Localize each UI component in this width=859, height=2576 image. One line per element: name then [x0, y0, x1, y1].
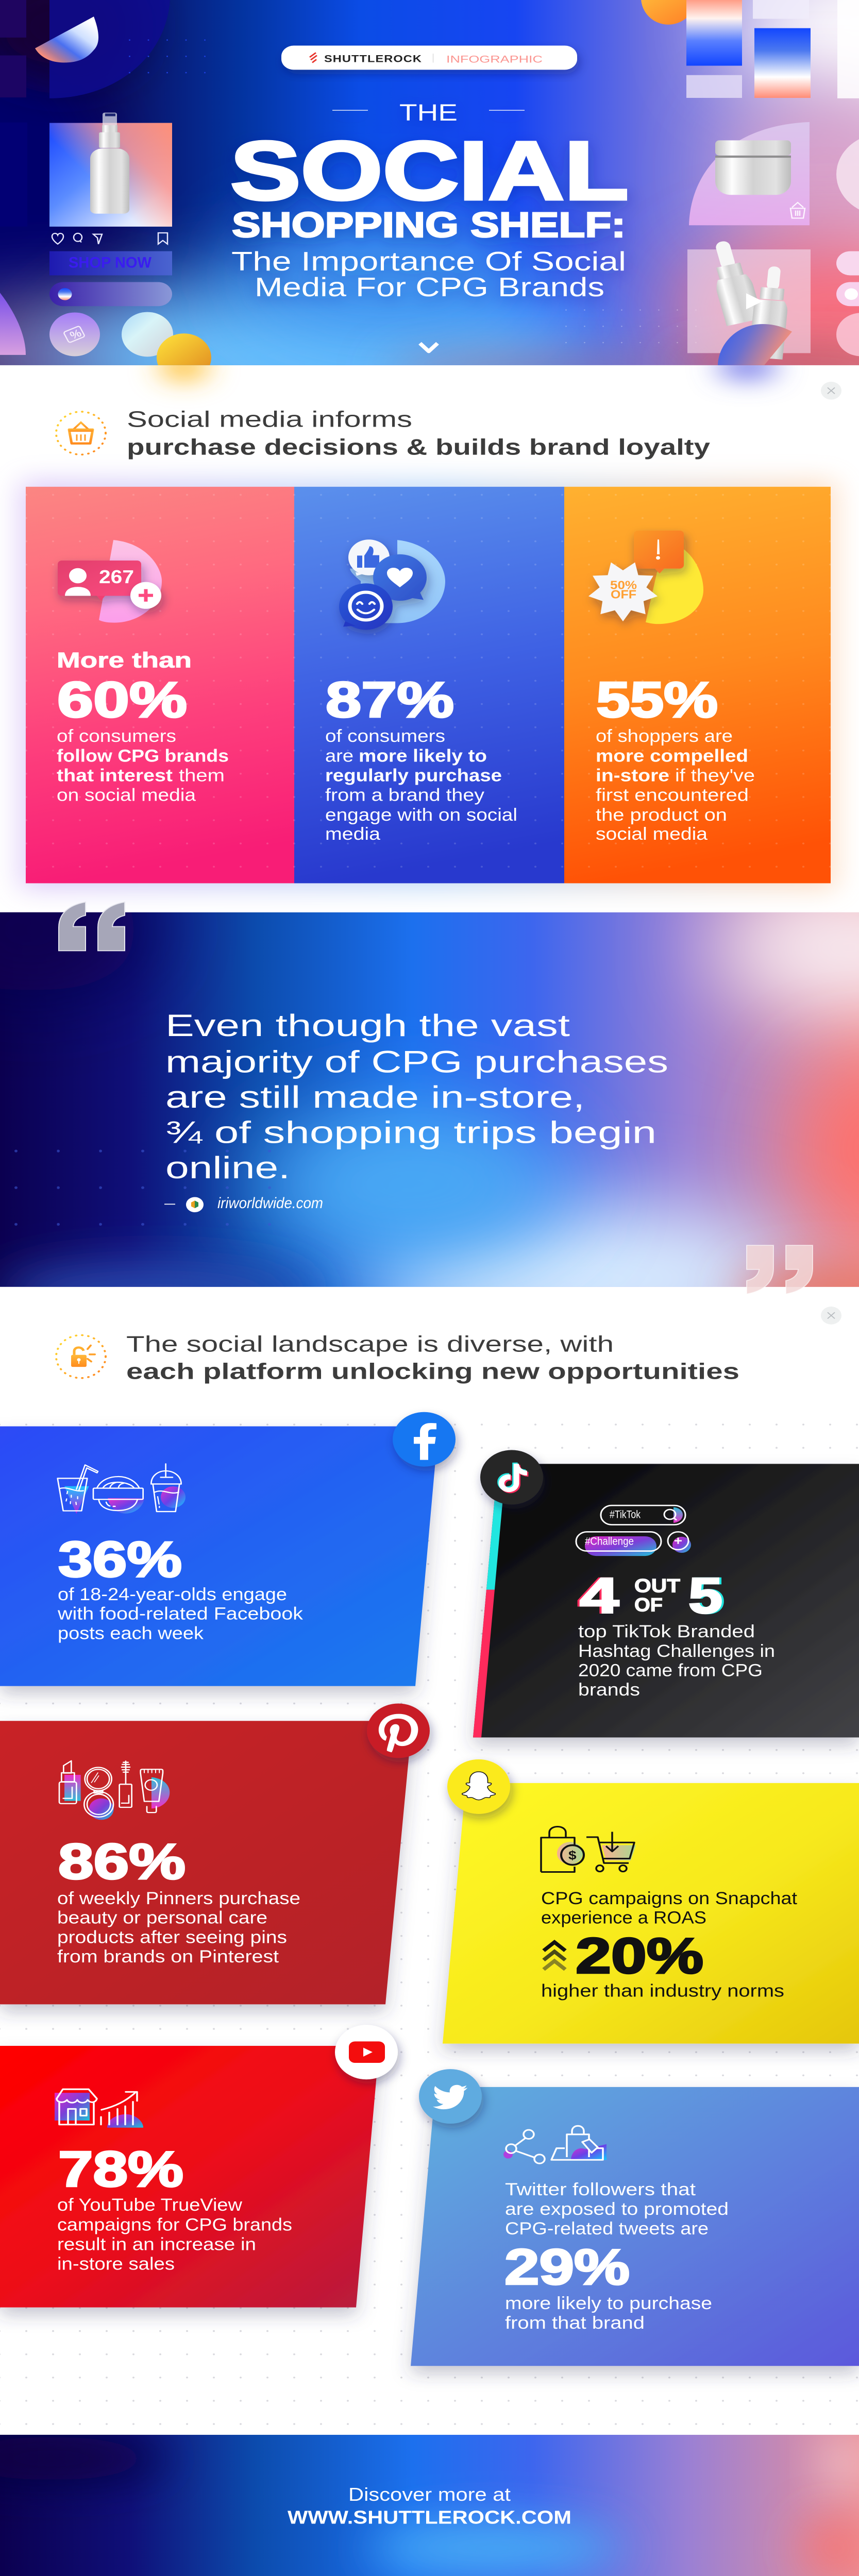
- close marker: section two: [821, 1307, 841, 1325]
- stat text: brands: [578, 1680, 640, 1699]
- stat text: follow CPG brands: [57, 746, 229, 766]
- stat text: on social media: [57, 785, 196, 805]
- stat text: More than: [57, 648, 192, 672]
- stat text: social media: [596, 824, 708, 844]
- heading: section one: Social media informs: [127, 407, 412, 432]
- title: THE: [399, 100, 458, 126]
- panel: footer: [0, 2435, 859, 2576]
- logo pill: SHUTTLEROCK: [324, 54, 422, 64]
- stat text: from that brand: [505, 2313, 645, 2333]
- title: SOCIAL: [230, 124, 629, 217]
- stat text: in-store: [596, 766, 669, 785]
- stat text: higher than industry norms: [541, 1981, 784, 2001]
- stat text: [325, 672, 517, 844]
- stat text: [57, 648, 229, 805]
- stat text: from a brand they: [325, 785, 485, 805]
- stat text: with food-related Facebook: [57, 1604, 304, 1623]
- stat text: the product on: [596, 805, 727, 824]
- panel glow: [21, 481, 836, 890]
- icon: twitter badge: [419, 2069, 482, 2124]
- call to action: WWW.SHUTTLEROCK.COM: [288, 2507, 571, 2528]
- oval badges: [49, 312, 173, 357]
- shop now button: SHOP NOW: [69, 254, 151, 271]
- panel: quote: [0, 867, 859, 1354]
- hero mesh gradient background: [0, 0, 859, 365]
- stat text: of weekly Pinners purchase: [57, 1888, 300, 1908]
- logo pill: INFOGRAPHIC: [446, 54, 543, 65]
- quote text: are still made in-store,: [165, 1079, 585, 1114]
- heading: section one: purchase decisions & builds brand loyalty: [127, 434, 710, 460]
- icon: follower notification: 267: [99, 567, 134, 588]
- stat text: [57, 2141, 292, 2274]
- icon: tiktok badge: [480, 1450, 543, 1504]
- serum bottles card: [687, 238, 811, 365]
- stat text: [541, 1888, 797, 2001]
- scroll chevron: [420, 343, 437, 351]
- stat: 4 out of 5: [578, 1568, 725, 1624]
- icon: hashtag search pills: #Challenge: [585, 1535, 634, 1547]
- icon: sale badge and alert: 50%: [610, 579, 637, 592]
- card: twitter: [411, 2069, 859, 2366]
- stat text: first encountered: [596, 785, 749, 805]
- card: facebook: [0, 1412, 456, 1686]
- stat text: of shoppers are: [596, 726, 733, 746]
- icon: sale badge and alert: [588, 531, 703, 624]
- stat text: of YouTube TrueView: [57, 2195, 243, 2215]
- stat text: more likely to: [359, 746, 487, 766]
- title: SHOPPING SHELF:: [232, 205, 626, 245]
- stat text: Twitter followers that: [505, 2179, 696, 2199]
- icon: pinterest badge: [367, 1703, 430, 1758]
- stat: 4 out of 5: 5: [688, 1568, 722, 1624]
- icon: bag and cart: $: [568, 1848, 577, 1862]
- stat text: 55%: [596, 672, 718, 728]
- stat text: CPG-related tweets are: [505, 2219, 709, 2239]
- stat text: regularly purchase: [325, 766, 502, 785]
- half-moon droplet: [35, 16, 98, 62]
- stat text: [57, 1834, 300, 1966]
- stat text: more compelled: [596, 746, 748, 766]
- stat text: 78%: [58, 2141, 183, 2197]
- icon: snapchat badge: [447, 1759, 510, 1814]
- opening quote mark: [59, 902, 125, 951]
- stat text: 29%: [504, 2239, 630, 2295]
- icon: follower notification: [58, 540, 162, 623]
- call to action: Discover more at: [348, 2484, 511, 2505]
- heading: section two: each platform unlocking new opportunities: [126, 1359, 739, 1384]
- icon: food and drinks: [58, 1464, 186, 1514]
- stat text: 20%: [576, 1928, 703, 1984]
- stat text: Hashtag Challenges in: [578, 1641, 775, 1661]
- stat text: CPG campaigns on Snapchat: [541, 1888, 797, 1908]
- heading: section two: The social landscape is diverse, with: [126, 1332, 614, 1357]
- stat text: 2020 came from CPG: [578, 1660, 763, 1680]
- heading: section one: [127, 407, 710, 460]
- logo pill: [281, 45, 577, 70]
- stat: 4 out of 5: OUT: [634, 1575, 680, 1597]
- shop now button: [49, 251, 172, 275]
- stat text: 86%: [58, 1834, 186, 1890]
- icon: sale badge and alert: OFF: [611, 588, 636, 601]
- stat text: result in an increase in: [57, 2234, 256, 2254]
- title: The Importance Of Social: [231, 246, 626, 276]
- stat text: posts each week: [58, 1623, 204, 1643]
- stat text: beauty or personal care: [57, 1908, 267, 1927]
- stat text: in-store sales: [57, 2254, 175, 2274]
- card: tiktok: [473, 1450, 859, 1737]
- icon: bag and cart: [541, 1826, 636, 1872]
- stat text: of consumers: [57, 726, 176, 746]
- stat text: them: [179, 766, 225, 785]
- card: snapchat: [443, 1759, 859, 2044]
- quote text: online.: [165, 1150, 290, 1185]
- stat text: of 18-24-year-olds engage: [58, 1584, 287, 1604]
- stat text: [578, 1621, 775, 1699]
- panel: 60%: [26, 487, 294, 883]
- stat text: 60%: [57, 672, 187, 728]
- stat text: top TikTok Branded: [578, 1621, 755, 1641]
- bottom-left arc: [0, 293, 26, 355]
- stat text: [57, 1532, 304, 1643]
- stat text: that interest: [57, 766, 173, 785]
- card: youtube: [0, 2025, 398, 2308]
- quote text: ¾ of shopping trips begin: [165, 1115, 656, 1149]
- call to action: [288, 2484, 571, 2528]
- stat text: media: [325, 824, 381, 844]
- quote text: majority of CPG purchases: [165, 1044, 668, 1079]
- icon: youtube badge: [335, 2025, 398, 2079]
- panel: hero header: [0, 0, 859, 365]
- quote text: Even though the vast: [165, 1008, 570, 1043]
- icon: share and shopping bag: [503, 2126, 607, 2163]
- heading: section two: [126, 1332, 739, 1384]
- source line: iriworldwide.com: [217, 1194, 323, 1212]
- source line: [164, 1194, 323, 1212]
- close marker: section one: [821, 382, 841, 400]
- icon: cosmetics: [59, 1761, 170, 1820]
- social action icons: [52, 233, 167, 244]
- quote mesh gradient: [0, 867, 859, 1354]
- right decorative blocks: [641, 0, 859, 356]
- stat text: more likely to purchase: [505, 2293, 712, 2313]
- panel: 55%: [564, 487, 831, 883]
- icon: hashtag search pills: #TikTok: [610, 1508, 641, 1520]
- stat text: of consumers: [325, 726, 445, 746]
- quote text: [165, 1008, 668, 1185]
- icon: padlock: [56, 1335, 106, 1378]
- shuttlerock logo mark: [310, 53, 317, 62]
- stat text: experience a ROAS: [541, 1908, 706, 1927]
- stat text: 87%: [326, 672, 454, 728]
- left decorative blocks: [0, 0, 699, 349]
- stat text: products after seeing pins: [57, 1927, 287, 1947]
- pill slider: [49, 282, 172, 306]
- stat text: 36%: [58, 1532, 182, 1587]
- stat text: from brands on Pinterest: [57, 1946, 279, 1966]
- footer mesh gradient: [0, 2435, 859, 2576]
- oval badges: %: [68, 327, 83, 342]
- stat text: campaigns for CPG brands: [57, 2215, 292, 2234]
- stat: 4 out of 5: 5: [690, 1568, 725, 1624]
- card: pinterest: [0, 1703, 430, 2004]
- stat text: [504, 2179, 729, 2333]
- icon: hashtag search pills: [576, 1505, 691, 1556]
- icon: shopping basket: [56, 412, 106, 454]
- stat text: if they've: [675, 766, 755, 785]
- icon: up chevrons: [544, 1942, 565, 1970]
- icon: store and growth chart: [55, 2089, 143, 2128]
- panel: 87%: [294, 487, 564, 883]
- icon: social reactions: [339, 539, 445, 630]
- stat: 4 out of 5: 4: [578, 1568, 617, 1624]
- stat text: [596, 672, 755, 844]
- spray bottle card: [49, 113, 172, 227]
- closing quote mark: [747, 1245, 813, 1294]
- yellow egg: [157, 333, 211, 382]
- stat: 4 out of 5: 4: [580, 1568, 619, 1624]
- stat: 4 out of 5: OF: [634, 1594, 663, 1616]
- title: [230, 100, 629, 302]
- stat text: are exposed to promoted: [505, 2199, 729, 2218]
- stat text: engage with on social: [325, 805, 517, 824]
- title: Media For CPG Brands: [255, 272, 604, 302]
- stat text: are: [325, 746, 353, 766]
- icon: facebook badge: [393, 1412, 456, 1467]
- jar card: [689, 122, 810, 225]
